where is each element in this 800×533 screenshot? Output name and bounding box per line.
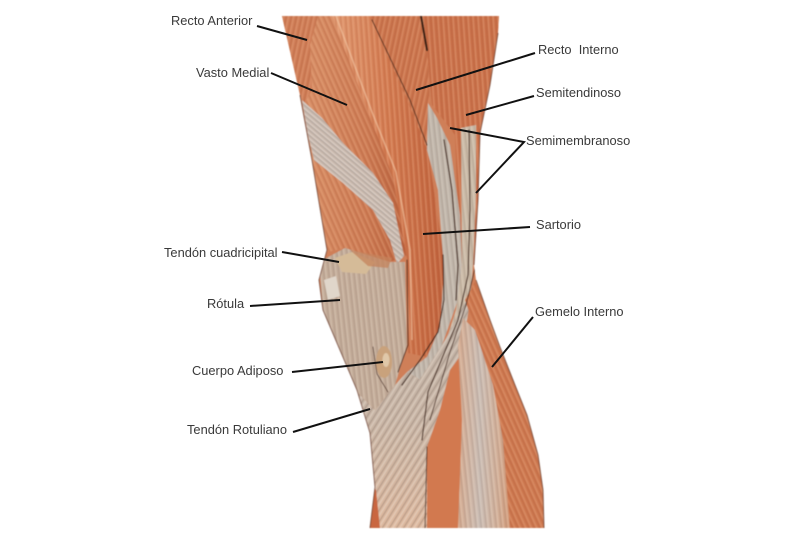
muscle: vasto medial bbox=[304, 16, 408, 262]
label: Tendón Rotuliano bbox=[187, 409, 370, 437]
muscle: recto interno bbox=[370, 16, 430, 150]
label: Semitendinoso: Semitendinoso bbox=[536, 85, 621, 100]
label: Recto Anterior bbox=[171, 13, 307, 40]
tendons: semitendinoso strips bbox=[448, 124, 477, 333]
knee tissue: cuadriceps tendon and patella bbox=[319, 248, 407, 410]
label: Sartorio: Sartorio bbox=[536, 217, 581, 232]
calf: inner orange belly bbox=[426, 358, 461, 528]
label: Tendón cuadricipital bbox=[164, 245, 339, 262]
fat pad: cuerpo adiposo bbox=[376, 346, 392, 378]
muscle: gemelo interno bbox=[465, 280, 544, 528]
muscle: semitendinoso and semimembranoso bbox=[424, 16, 498, 239]
muscle group bbox=[280, 16, 544, 528]
muscle: lower orange strip bbox=[370, 489, 380, 529]
leg outline bbox=[300, 33, 544, 528]
label: Recto Interno: Recto Interno bbox=[538, 42, 619, 57]
label: Semimembranoso bbox=[450, 128, 630, 193]
label: Semimembranoso: Semimembranoso bbox=[526, 133, 630, 148]
leg silhouette bbox=[282, 16, 544, 528]
illustration: knee muscles bbox=[280, 16, 544, 528]
label: Vasto Medial bbox=[196, 65, 347, 105]
tendon: aponeurosis band bbox=[302, 100, 404, 264]
dark fibre gaps bbox=[372, 16, 477, 528]
label: Gemelo Interno bbox=[492, 304, 624, 367]
label: Sartorio bbox=[423, 217, 581, 234]
muscle: recto anterior bbox=[283, 16, 317, 101]
calf: pale central tendon bbox=[458, 318, 512, 528]
label: Rótula bbox=[207, 296, 340, 311]
muscle: sartorio bbox=[332, 16, 443, 357]
label: Tendón Rotuliano: Tendón Rotuliano bbox=[187, 422, 287, 437]
label: Recto Anterior: Recto Anterior bbox=[171, 13, 253, 28]
label: Vasto Medial: Vasto Medial bbox=[196, 65, 269, 80]
label: Cuerpo Adiposo: Cuerpo Adiposo bbox=[192, 363, 283, 378]
label: Gemelo Interno: Gemelo Interno bbox=[535, 304, 624, 319]
label: Semitendinoso bbox=[466, 85, 621, 115]
tendon: recto interno grey tendon bbox=[407, 103, 462, 380]
label: Recto Interno bbox=[416, 42, 619, 90]
label: Tendón cuadricipital: Tendón cuadricipital bbox=[164, 245, 278, 260]
light sartorius highlight bbox=[336, 16, 412, 340]
infographic: knee anatomy bbox=[164, 15, 630, 529]
label: Rótula: Rótula bbox=[207, 296, 245, 311]
label: Cuerpo Adiposo bbox=[192, 362, 383, 378]
tendon: hatch area rotuliano bbox=[357, 290, 472, 528]
